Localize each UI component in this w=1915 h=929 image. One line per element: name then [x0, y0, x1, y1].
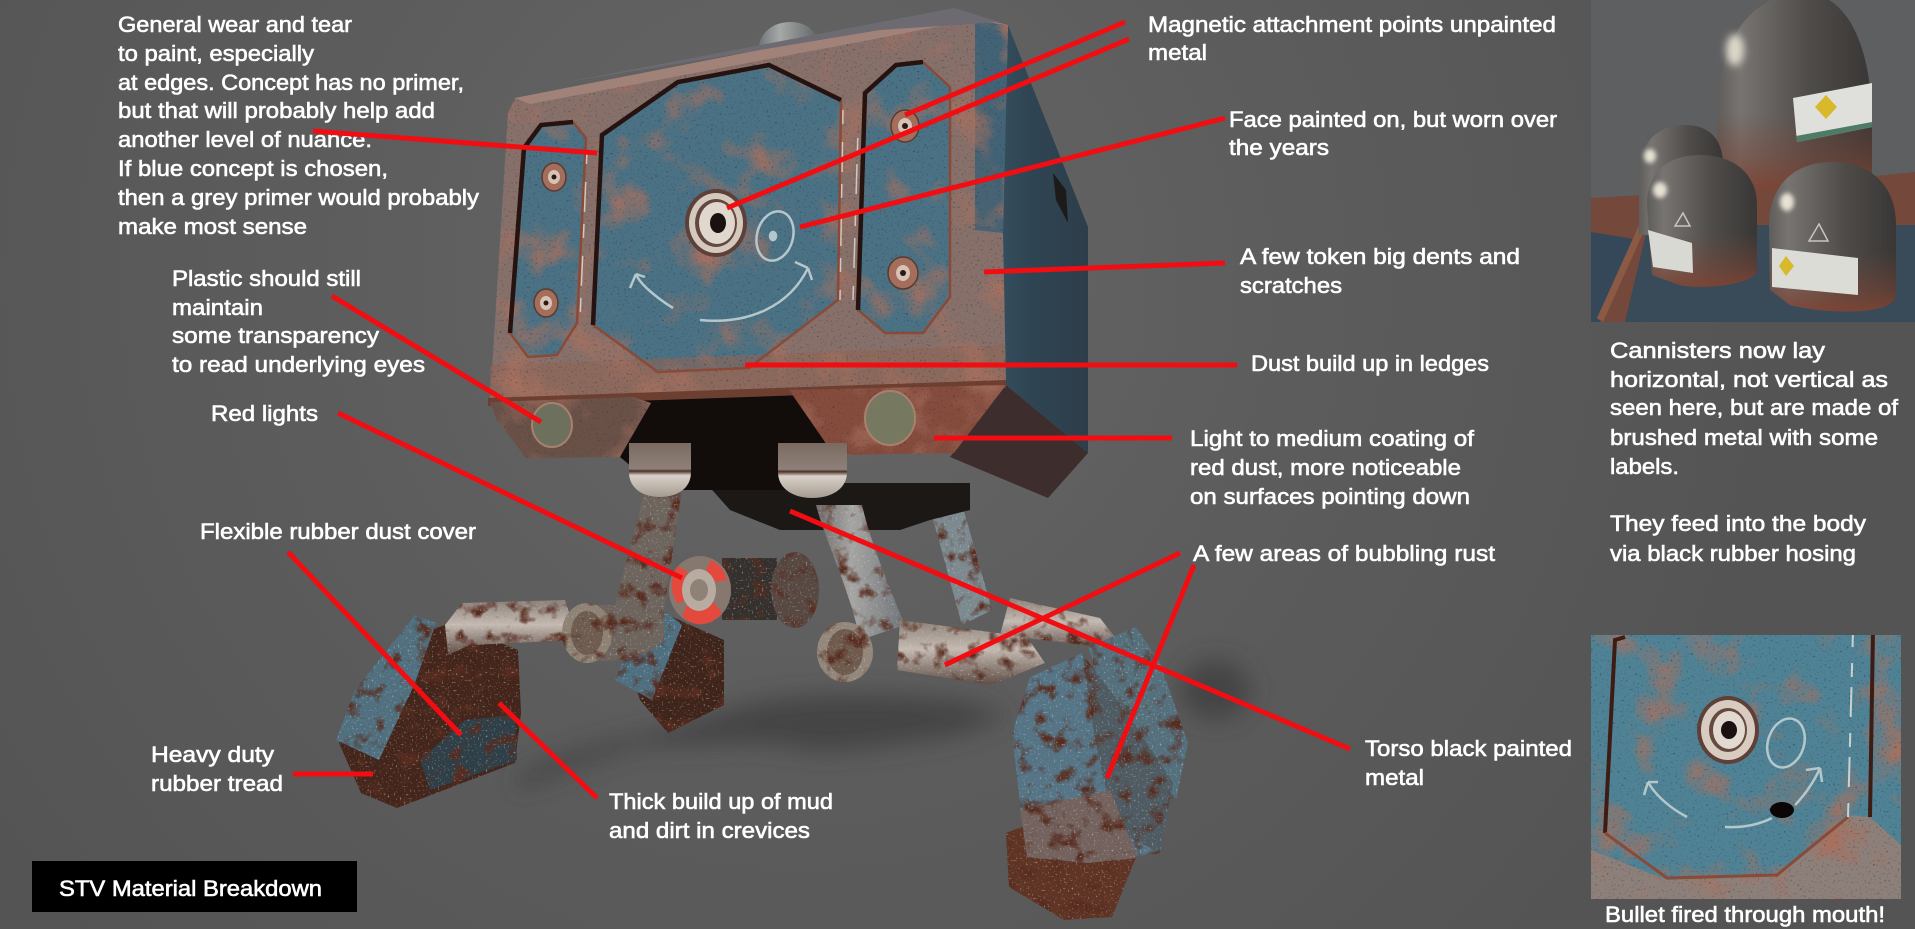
- plastic text: [172, 266, 425, 377]
- text block: canisters description: Cannisters now lay: [1610, 338, 1825, 363]
- bullet panel outline: [1605, 630, 1873, 833]
- callout: heavy duty rubber tread: [151, 742, 373, 796]
- robot: [336, 8, 1188, 920]
- coating text: [1190, 426, 1475, 509]
- back small canister: [1639, 125, 1723, 235]
- wear text: General wear and tear: [118, 12, 352, 37]
- face leader line: [800, 118, 1225, 227]
- callout: torso: [790, 511, 1572, 790]
- torso text: [1365, 736, 1572, 790]
- dust cover text: Flexible rubber dust cover: [200, 519, 476, 544]
- robot: top dome: [758, 22, 820, 50]
- ground shadow: [515, 660, 1250, 790]
- dents text: A few token big dents and: [1240, 244, 1520, 269]
- robot: small bolts: [534, 110, 919, 317]
- bullet panel lower edge: [1605, 630, 1853, 878]
- dents text: scratches: [1240, 273, 1342, 298]
- large canister: [1717, 0, 1872, 190]
- callout: red dust coating: [934, 426, 1475, 509]
- coating text: Light to medium coating of: [1190, 426, 1475, 451]
- bubbling text: A few areas of bubbling rust: [1193, 541, 1495, 566]
- robot: torso: [706, 483, 970, 530]
- panel: bullet hole closeup: [1591, 630, 1901, 899]
- torso text: Torso black painted: [1365, 736, 1572, 761]
- callout: magnetic attachment points: [727, 12, 1556, 208]
- caption: bullet fired through mouth: Bullet fired through mouth!: [1605, 902, 1885, 927]
- coating text: red dust, more noticeable: [1190, 455, 1461, 480]
- red lights leader line: [338, 413, 682, 578]
- middle small canister: [1647, 155, 1757, 287]
- robot: red light hub: [669, 556, 731, 624]
- magnetic text: Magnetic attachment points unpainted: [1148, 12, 1556, 37]
- text block: canisters description: via black rubber hosing: [1610, 541, 1856, 566]
- robot: central eye bolt: [685, 189, 747, 257]
- ledges leader line: [745, 362, 1237, 368]
- torso text: metal: [1365, 765, 1424, 790]
- mud leader line: [499, 703, 597, 798]
- mud text: and dirt in crevices: [609, 818, 810, 843]
- robot: front right strut: [816, 505, 905, 640]
- robot: rear right foot: [1088, 627, 1188, 800]
- plastic text: maintain: [172, 295, 263, 320]
- wear text: at edges. Concept has no primer,: [118, 70, 464, 95]
- robot: rear left foot: [615, 610, 724, 733]
- ledges text: Dust build up in ledges: [1251, 351, 1489, 376]
- magnetic text: [1148, 12, 1556, 65]
- robot: panel outlines: [510, 62, 950, 372]
- canister platform: [1591, 172, 1915, 322]
- callout: flexible rubber dust cover: [200, 519, 476, 735]
- title box: [32, 861, 357, 912]
- bullet closeup chalk face: [1644, 714, 1822, 827]
- red lights text: Red lights: [211, 401, 318, 426]
- wear text: another level of nuance.: [118, 127, 372, 152]
- callout: dents and scratches: [984, 244, 1520, 298]
- robot: clamps: [629, 443, 847, 498]
- callout: general wear and tear: [118, 12, 597, 239]
- tread text: [151, 742, 283, 796]
- face text: [1229, 107, 1557, 160]
- text block: canisters description: horizontal, not vertical as: [1610, 367, 1888, 392]
- bullet closeup eye bolt: [1697, 696, 1759, 764]
- robot: front left foot: [336, 615, 521, 808]
- plastic text: Plastic should still: [172, 266, 361, 291]
- wear text: If blue concept is chosen,: [118, 156, 388, 181]
- wear leader line: [313, 131, 597, 153]
- coating leader line: [934, 436, 1172, 440]
- robot: lower right prism: [789, 385, 1006, 455]
- face text: the years: [1229, 135, 1329, 160]
- robot: rear left strut: [590, 490, 682, 661]
- text block: canisters description: They feed into the body: [1610, 511, 1866, 536]
- robot: underside: [620, 388, 834, 490]
- wear text: make most sense: [118, 214, 307, 239]
- magnetic text: metal: [1148, 40, 1207, 65]
- callout: plastic: [172, 266, 541, 422]
- robot: body side: [950, 20, 1088, 498]
- tread text: Heavy duty: [151, 742, 274, 767]
- wear text: [118, 12, 479, 239]
- callout: bubbling rust: [945, 541, 1495, 778]
- robot: right plastic lens: [865, 391, 915, 445]
- robot: front right foot: [1006, 653, 1173, 920]
- robot: chalk face: [630, 207, 812, 321]
- robot: front right arm: [817, 620, 1045, 685]
- plastic text: to read underlying eyes: [172, 352, 425, 377]
- text block: canisters description: labels.: [1610, 454, 1679, 479]
- callout: mud and dirt: [499, 703, 833, 843]
- robot: body front: [488, 8, 1008, 406]
- right small canister: [1769, 162, 1896, 312]
- robot: left plastic lens: [532, 403, 572, 447]
- wear text: then a grey primer would probably: [118, 185, 479, 210]
- robot: left upper arm and joint: [445, 600, 612, 663]
- plastic leader line: [332, 296, 541, 422]
- mud text: [609, 789, 833, 843]
- robot: rear right arm: [1000, 598, 1125, 650]
- robot: rear right strut: [925, 490, 992, 625]
- wear text: but that will probably help add: [118, 98, 435, 123]
- magnetic leader lines: [727, 22, 1129, 208]
- mud text: Thick build up of mud: [609, 789, 833, 814]
- tread text: rubber tread: [151, 771, 283, 796]
- torso leader line: [790, 511, 1350, 749]
- robot: lower left prism: [490, 397, 651, 458]
- bullet hole: [1770, 802, 1794, 818]
- face text: Face painted on, but worn over: [1229, 107, 1557, 132]
- text block: canisters description: seen here, but are made of: [1610, 395, 1899, 420]
- dents text: [1240, 244, 1520, 298]
- dents leader line: [984, 263, 1225, 272]
- callout: face painted: [800, 107, 1557, 227]
- panel: canisters render: [1591, 0, 1915, 322]
- dust cover leader line: [288, 552, 461, 735]
- plastic text: some transparency: [172, 323, 379, 348]
- callout: red lights: [211, 401, 682, 578]
- tread leader line: [293, 772, 373, 776]
- robot: hub drum and disc: [722, 552, 819, 628]
- text block: canisters description: brushed metal with some: [1610, 425, 1878, 450]
- title: STV Material Breakdown: [59, 876, 322, 901]
- bubbling leader lines: [945, 553, 1194, 778]
- coating text: on surfaces pointing down: [1190, 484, 1470, 509]
- wear text: to paint, especially: [118, 41, 314, 66]
- text block: canisters description: [1610, 338, 1899, 566]
